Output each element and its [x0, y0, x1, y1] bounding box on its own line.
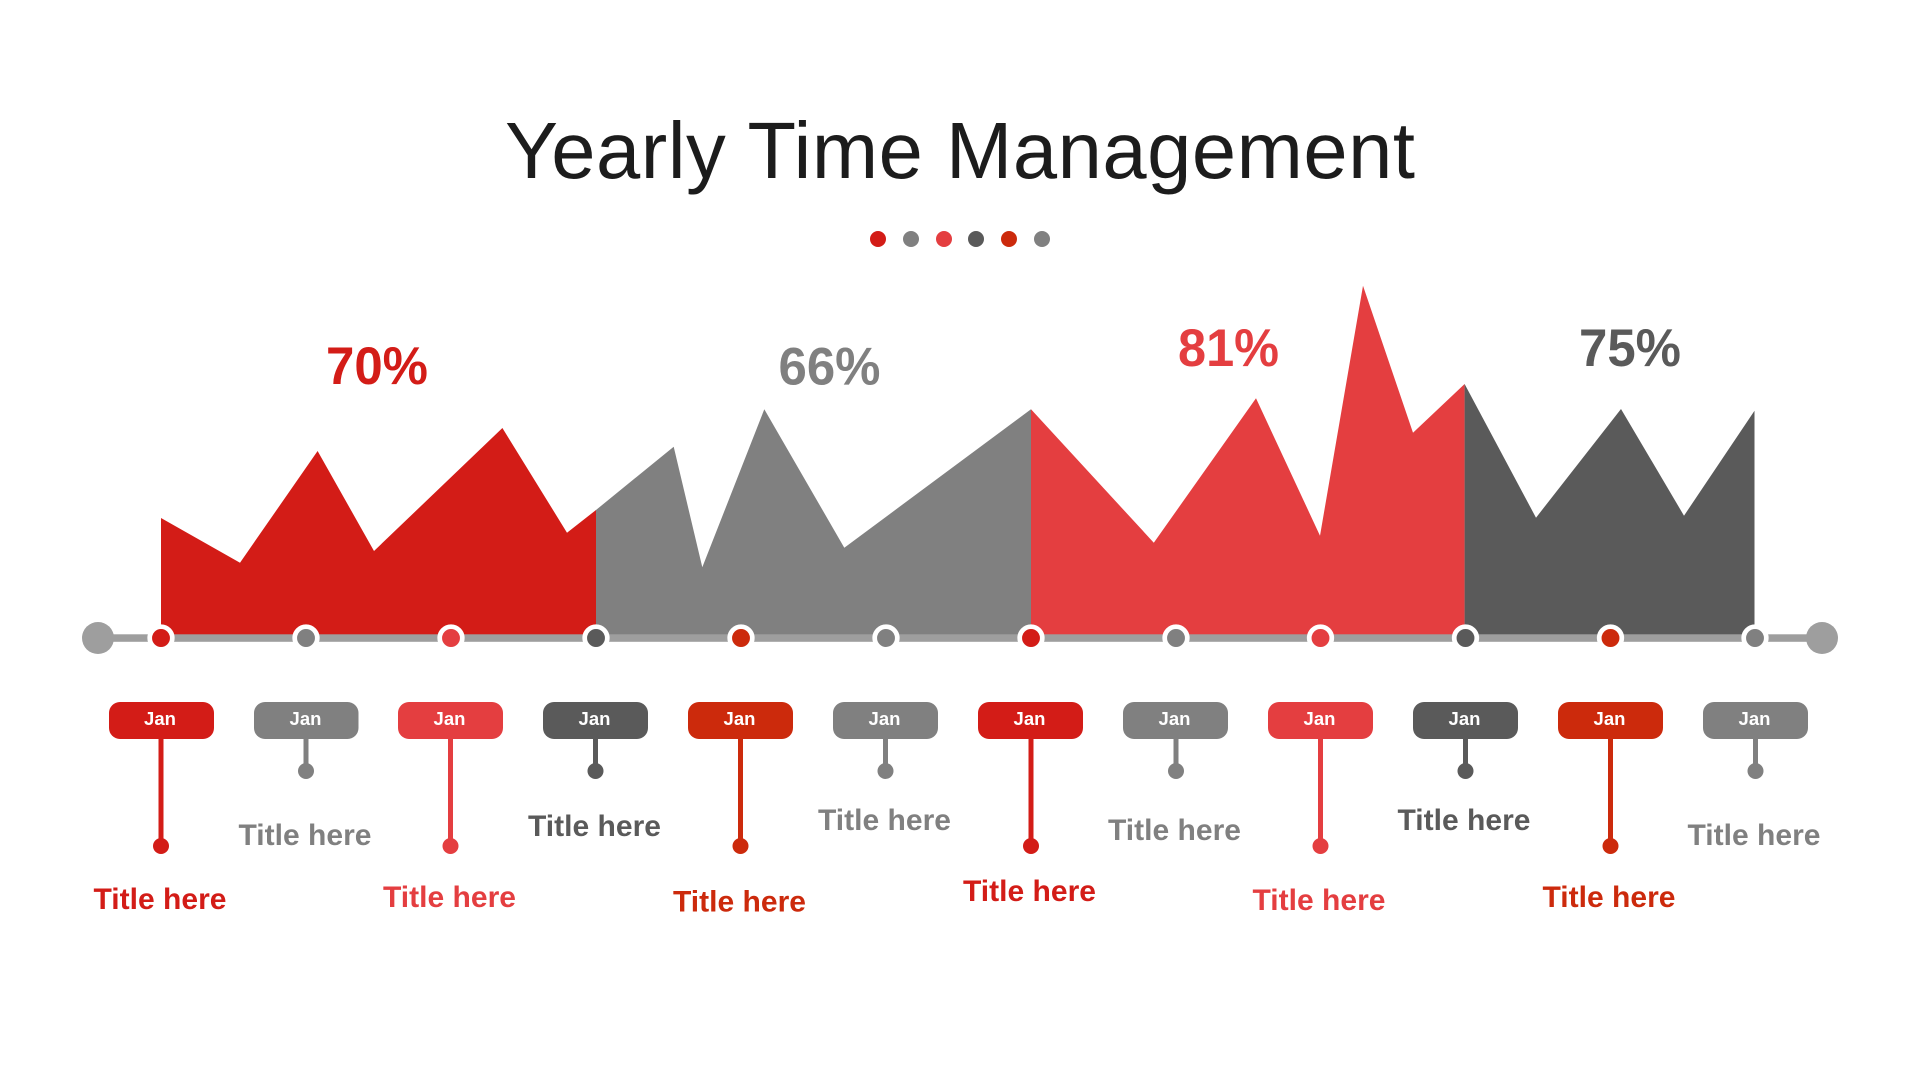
- percentage: 66%: 66%: [778, 337, 880, 396]
- item 11: Jan: [1594, 708, 1625, 729]
- percentage: 70%: 70%: [326, 337, 428, 396]
- item 12: Title here: [1688, 819, 1820, 852]
- item 8: Jan: [1159, 708, 1190, 729]
- area: first quarter: [161, 428, 596, 634]
- area: fourth quarter: [1465, 384, 1754, 634]
- item 8: [1108, 702, 1241, 847]
- item 7: Jan: [1014, 708, 1045, 729]
- item 2: Jan: [290, 708, 321, 729]
- item 6: Title here: [818, 804, 951, 837]
- item 10: Jan: [1449, 708, 1480, 729]
- item 3: Jan: [434, 708, 465, 729]
- item 4: Jan: [579, 708, 610, 729]
- item 11: [1542, 702, 1676, 914]
- item 7: Title here: [963, 875, 1096, 908]
- area: third quarter: [1031, 286, 1465, 634]
- item 10: [1398, 702, 1530, 837]
- area: second quarter: [596, 409, 1031, 634]
- item 9: Title here: [1252, 884, 1386, 917]
- item 12: [1688, 702, 1820, 852]
- decorative title dots: [870, 231, 1050, 247]
- item 8: Title here: [1108, 814, 1241, 847]
- item 9: [1252, 702, 1386, 917]
- item 4: [528, 702, 661, 843]
- item 3: Title here: [383, 881, 516, 914]
- item 9: Jan: [1304, 708, 1335, 729]
- item 4: Title here: [528, 810, 661, 843]
- item 1: [94, 702, 226, 916]
- item 12: Jan: [1739, 708, 1770, 729]
- item 7: [963, 702, 1096, 908]
- item 5: Jan: [724, 708, 755, 729]
- item 5: Title here: [673, 886, 806, 918]
- item 10: Title here: [1398, 804, 1530, 837]
- timeline markers: [150, 627, 1766, 649]
- item 1: Jan: [144, 708, 176, 729]
- title: Yearly Time Management: [505, 106, 1415, 195]
- item 3: [383, 702, 516, 914]
- item 6: [818, 702, 951, 837]
- percentage: 75%: 75%: [1579, 319, 1681, 378]
- item 2: Title here: [238, 819, 372, 852]
- item 11: Title here: [1542, 881, 1676, 914]
- item 1: Title here: [94, 883, 226, 916]
- item 2: [238, 702, 372, 852]
- timeline axis: [82, 622, 1838, 654]
- area chart: [161, 286, 1754, 634]
- item 5: [673, 702, 806, 918]
- item 6: Jan: [869, 708, 900, 729]
- percentage: 81%: 81%: [1178, 319, 1279, 378]
